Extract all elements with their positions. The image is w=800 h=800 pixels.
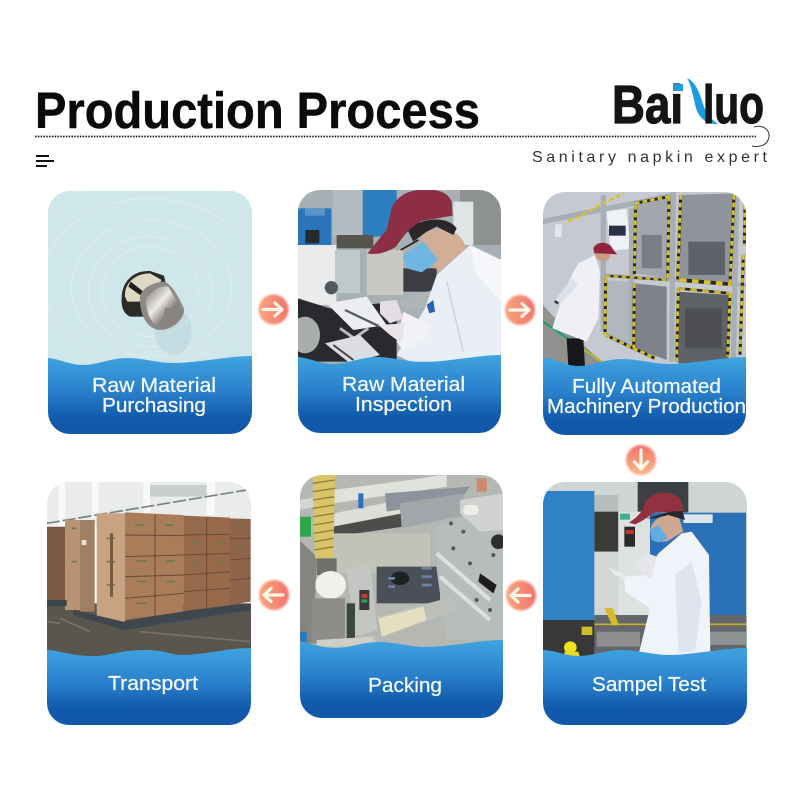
panel: raw material purchasing	[43, 190, 257, 434]
panel: sample test	[542, 482, 748, 725]
logo: Bailuo	[612, 75, 764, 135]
panel: raw material inspection	[290, 188, 503, 433]
arrow: left 1	[506, 580, 536, 610]
icon: menu lines	[36, 155, 54, 167]
wave banner	[543, 648, 747, 725]
label: Fully Automated	[572, 376, 721, 398]
arrow: right 2	[505, 295, 535, 325]
label: Packing	[368, 675, 442, 697]
arrow: left 2	[259, 580, 289, 610]
wave banner	[48, 356, 252, 434]
wave banner	[543, 357, 746, 435]
photo: enclosed production line	[542, 192, 748, 368]
label: Machinery Production	[547, 396, 746, 418]
tagline: Sanitary napkin expert	[532, 149, 768, 166]
label	[547, 376, 746, 418]
wave banner	[300, 640, 503, 718]
logo: Bailuo: luo	[703, 75, 764, 135]
arrow: right 1	[258, 294, 288, 324]
photo: technician by test chambers	[542, 482, 748, 658]
label: Raw Material	[342, 374, 465, 396]
photo: paper roll with steel nozzle	[43, 190, 257, 367]
wave banner	[298, 355, 501, 433]
photo: lab technician	[290, 188, 503, 365]
wave banner	[47, 648, 251, 725]
panel: packing	[297, 473, 507, 718]
label: Sampel Test	[592, 674, 706, 696]
arrow: down	[626, 445, 656, 475]
panel: transport	[47, 482, 253, 725]
title: Production Process	[35, 82, 480, 139]
panel: fully automated machinery production	[542, 192, 748, 435]
label: Raw Material	[92, 375, 216, 397]
label	[342, 374, 465, 416]
label: Purchasing	[102, 395, 206, 417]
dotted divider with end curl	[35, 126, 769, 147]
photo: packing machine	[297, 473, 507, 650]
label: Inspection	[355, 394, 452, 416]
logo: Bailuo: Bai	[612, 75, 683, 135]
label	[92, 375, 216, 417]
label: Transport	[108, 673, 198, 695]
photo: warehouse with pallets of boxes	[47, 482, 253, 660]
